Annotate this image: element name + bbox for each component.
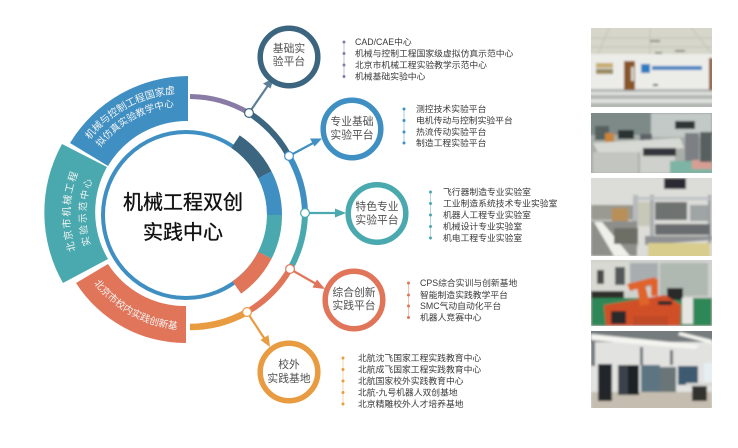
segment: Beijing demonstration centre — [44, 144, 108, 283]
platform: 专业基础实验平台: 专业基础 — [330, 116, 374, 128]
list: 专业基础实验平台 items — [402, 103, 513, 148]
list: 特色专业实验平台 items: 机械设计专业实验室 — [443, 220, 522, 232]
segment: virtual simulation centre: 拟仿真实验教学中心 — [95, 100, 174, 148]
photo: mechanical lab equipment — [589, 111, 714, 175]
platform: 专业基础实验平台 — [323, 100, 381, 158]
outer segmented ring — [190, 96, 305, 327]
title: centre text: 机械工程双创 — [123, 192, 243, 214]
segment: Beijing demonstration centre: 北京市机械工程 — [62, 171, 78, 252]
segment: on-campus innovation base — [76, 264, 186, 343]
platform: 基础实验平台 — [260, 28, 318, 86]
platform: 特色专业实验平台: 特色专业 — [355, 201, 399, 213]
list: 专业基础实验平台 items: 热流传动实验平台 — [416, 126, 487, 137]
list: 综合创新实践平台 items: SMC气动自动化平台 — [420, 300, 501, 311]
title: centre text: 实践中心 — [143, 221, 223, 244]
photo: aluminium frame work cell — [589, 176, 714, 258]
list: 基础实验平台 items: 机械基础实验中心 — [355, 70, 426, 82]
list: 特色专业实验平台 items: 飞行器制造专业实验室 — [443, 186, 531, 197]
segment: on-campus innovation base: 北京市校内实践创新基 — [94, 280, 178, 330]
segment: Beijing demonstration centre: 实验示范中心 — [78, 180, 92, 246]
photo: lobby wall with signage — [589, 26, 714, 109]
list: 特色专业实验平台 items: 工业制造系统技术专业实验室 — [443, 198, 558, 208]
list: 校外实践基地 items: 北京精雕校外人才培养基地 — [358, 398, 464, 409]
platform: 特色专业实验平台 — [348, 185, 406, 242]
list: 综合创新实践平台 items: CPS综合实训与创新基地 — [420, 277, 517, 288]
list: 综合创新实践平台 items: 智能制造实践教学平台 — [420, 289, 508, 300]
ring junction nodes — [243, 109, 309, 316]
platform: 综合创新实践平台: 综合创新 — [332, 287, 376, 299]
list: 特色专业实验平台 items — [429, 186, 558, 243]
list: 专业基础实验平台 items: 电机传动与控制实验平台 — [416, 114, 513, 126]
list: 校外实践基地 items: 北航国家校外实践教育中心 — [358, 375, 464, 386]
platform: 专业基础实验平台: 实验平台 — [330, 128, 374, 142]
list: 综合创新实践平台 items: 机器人竞赛中心 — [420, 312, 482, 322]
platform: 校外实践基地: 校外 — [278, 359, 300, 371]
list: 专业基础实验平台 items: 测控技术实验平台 — [416, 103, 487, 114]
list: 基础实验平台 items: CAD/CAE中心 — [355, 36, 412, 47]
list: 校外实践基地 items: 北航成飞国家工程实践教育中心 — [358, 364, 481, 374]
inner thin ring — [103, 132, 269, 298]
platform: 综合创新实践平台 — [325, 271, 383, 329]
list: 特色专业实验平台 items: 机电工程专业实验室 — [443, 232, 522, 243]
inner thick coloured arcs — [236, 142, 275, 288]
list: 特色专业实验平台 items: 机器人工程专业实验室 — [443, 209, 531, 220]
list: 综合创新实践平台 items — [407, 277, 517, 322]
platform: 特色专业实验平台: 实验平台 — [355, 212, 399, 226]
list: 校外实践基地 items: 北航沈飞国家工程实践教育中心 — [358, 352, 481, 363]
list: 校外实践基地 items — [342, 352, 481, 409]
list: 基础实验平台 items: 机械与控制工程国家级虚拟仿真示范中心 — [355, 48, 514, 58]
photo: large lab with test cabinets — [589, 329, 714, 410]
segment: virtual simulation centre — [70, 76, 188, 166]
segment: virtual simulation centre: 机械与控制工程国家虚 — [84, 86, 175, 139]
list: 校外实践基地 items: 北航-九号机器人双创基地 — [358, 386, 458, 398]
panel: central hub diagram — [44, 76, 282, 343]
platform: 基础实验平台: 验平台 — [273, 54, 305, 68]
arrows from ring to platforms — [247, 78, 346, 347]
platform: 基础实验平台: 基础实 — [273, 43, 305, 55]
platform: 校外实践基地 — [260, 343, 318, 401]
list: 专业基础实验平台 items: 制造工程实验平台 — [416, 137, 487, 148]
platform: 综合创新实践平台: 实践平台 — [332, 298, 376, 312]
list: 基础实验平台 items — [342, 36, 514, 82]
list: 基础实验平台 items: 北京市机械工程实验教学示范中心 — [355, 59, 487, 70]
platform: 校外实践基地: 实践基地 — [267, 371, 311, 385]
photo: orange robot arm — [589, 258, 714, 328]
